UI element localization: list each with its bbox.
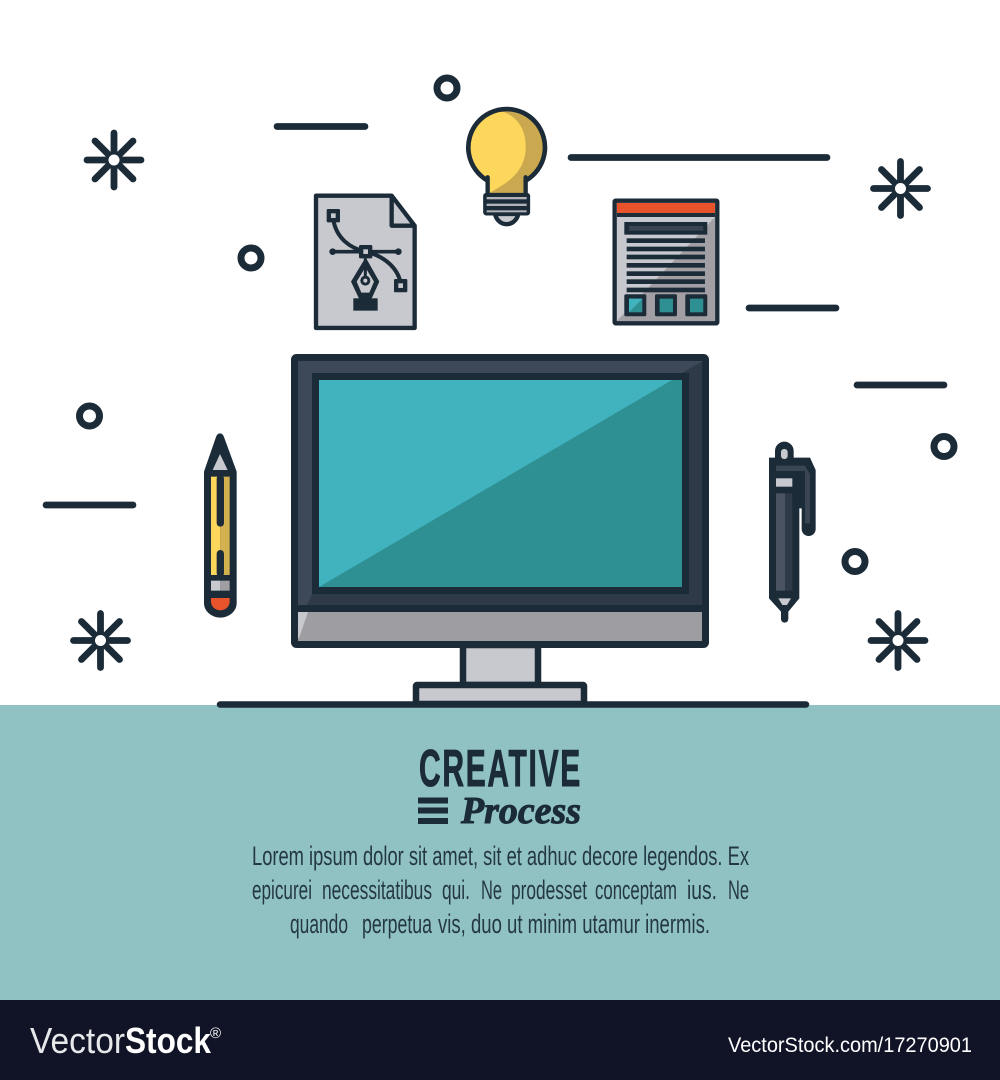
text block: description: ius.: [687, 875, 717, 905]
text block: description: Lorem ipsum dolor sit amet, sit et adhuc decore legendos. Ex: [252, 841, 749, 871]
logo: vectorstock: Stock: [125, 1020, 212, 1061]
monitor screen: [316, 376, 686, 590]
text block: description: Ne: [481, 875, 502, 905]
monitor stand: [463, 645, 538, 685]
text block: description: vis, duo ut minim utamur inermis.: [438, 909, 710, 939]
ground line: [220, 701, 806, 708]
icon: sparkle bottom right: [871, 614, 925, 668]
logo: vectorstock: Vector: [30, 1020, 125, 1061]
footer image id: VectorStock.com/17270901: [728, 1034, 972, 1057]
decorative lines: [46, 126, 944, 505]
icon: menu bars: [418, 798, 448, 824]
text block: description: qui.: [442, 875, 470, 905]
monitor: [294, 358, 706, 704]
panel: caption background: [0, 705, 1000, 1000]
logo: vectorstock: ®: [210, 1025, 221, 1042]
text block: description: perpetua: [362, 909, 433, 939]
logo: vectorstock: [30, 1020, 221, 1061]
monitor body: [294, 358, 706, 644]
text block: description: quando: [290, 909, 348, 939]
text block: description: Ne: [728, 875, 749, 905]
icon: sparkle top right: [874, 162, 928, 216]
monitor chin: [298, 612, 702, 641]
title: process: Process: [460, 790, 581, 832]
monitor base: [416, 685, 584, 704]
title: creative: CREATIVE: [419, 739, 582, 797]
decorative rings: [80, 78, 954, 572]
text block: description: necessitatibus: [322, 875, 432, 905]
icon: web page window: [615, 201, 717, 323]
icon: pencil: [204, 433, 237, 618]
icon: pen: [769, 442, 816, 623]
text block: description: [252, 841, 749, 939]
icon: light bulb: [468, 109, 545, 224]
text block: description: epicurei: [252, 875, 312, 905]
text block: description: prodesset: [511, 875, 587, 905]
icon: sparkle bottom left: [74, 614, 128, 668]
panel: footer bar: [0, 1000, 1000, 1080]
icon: sparkle top left: [87, 133, 141, 187]
icon: vector document: [316, 196, 415, 328]
text block: description: conceptam: [595, 875, 677, 905]
